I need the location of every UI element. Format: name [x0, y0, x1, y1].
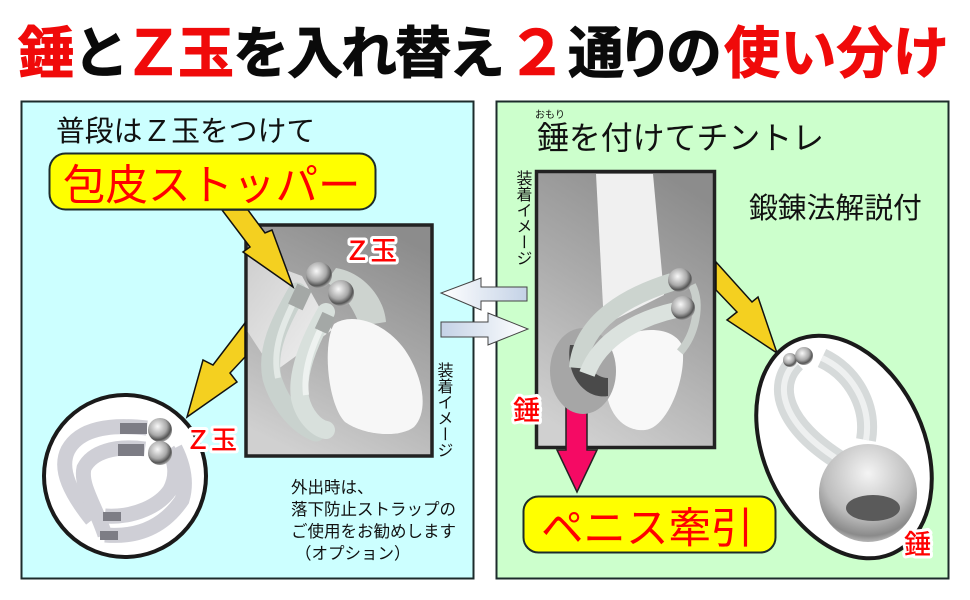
title: 錘	[18, 22, 74, 85]
photo: weight fitted contents	[550, 174, 697, 430]
callout: foreskin stopper: 包皮ストッパー	[63, 163, 361, 210]
note: strap advice: （オプション）	[295, 544, 410, 563]
label: Z-ball: Ｚ玉	[344, 236, 397, 266]
heading: left panel: 普段はＺ玉をつけて	[56, 116, 315, 148]
vertical caption right: 装着イメージ	[514, 170, 532, 266]
heading: training method note: 鍛錬法解説付	[749, 193, 922, 225]
note: strap advice: 外出時は、	[291, 478, 374, 497]
title: と	[73, 22, 129, 85]
label: weight detail: 錘	[904, 530, 931, 560]
title: 通りの	[568, 22, 722, 85]
icon: ring detail circle	[44, 395, 237, 557]
note: strap advice	[291, 478, 456, 563]
arrow: photo to ring	[187, 323, 245, 417]
arrow: swap left	[441, 278, 527, 310]
vertical caption left: 装着イメージ	[434, 362, 454, 458]
icon: weight detail ellipse	[722, 307, 966, 587]
title: Ｚ	[122, 20, 184, 89]
label: weight on photo: 錘	[513, 396, 540, 426]
callout: traction: ペニス牽引	[541, 506, 754, 553]
title	[18, 20, 949, 89]
label: Z-ball detail: Ｚ玉	[185, 425, 237, 455]
arrow: stopper to ball	[222, 210, 293, 287]
arrow: photo to weight	[716, 262, 777, 353]
panel: weight use	[496, 102, 948, 578]
title: 使い分け	[724, 22, 949, 85]
note: strap advice: ご使用をお勧めします	[291, 522, 456, 541]
arrow: traction	[557, 403, 597, 492]
heading: right panel: おもり	[535, 109, 565, 121]
photo: weight fitted frame	[536, 172, 714, 448]
heading: right panel: 錘を付けてチントレ	[537, 120, 824, 156]
photo: Z-ball fitted	[246, 225, 432, 456]
title: 玉	[178, 22, 234, 85]
arrow: swap right	[441, 313, 528, 345]
note: strap advice: 落下防止ストラップの	[291, 500, 456, 519]
title: を入れ替え	[233, 22, 505, 85]
title: ２	[506, 20, 568, 89]
